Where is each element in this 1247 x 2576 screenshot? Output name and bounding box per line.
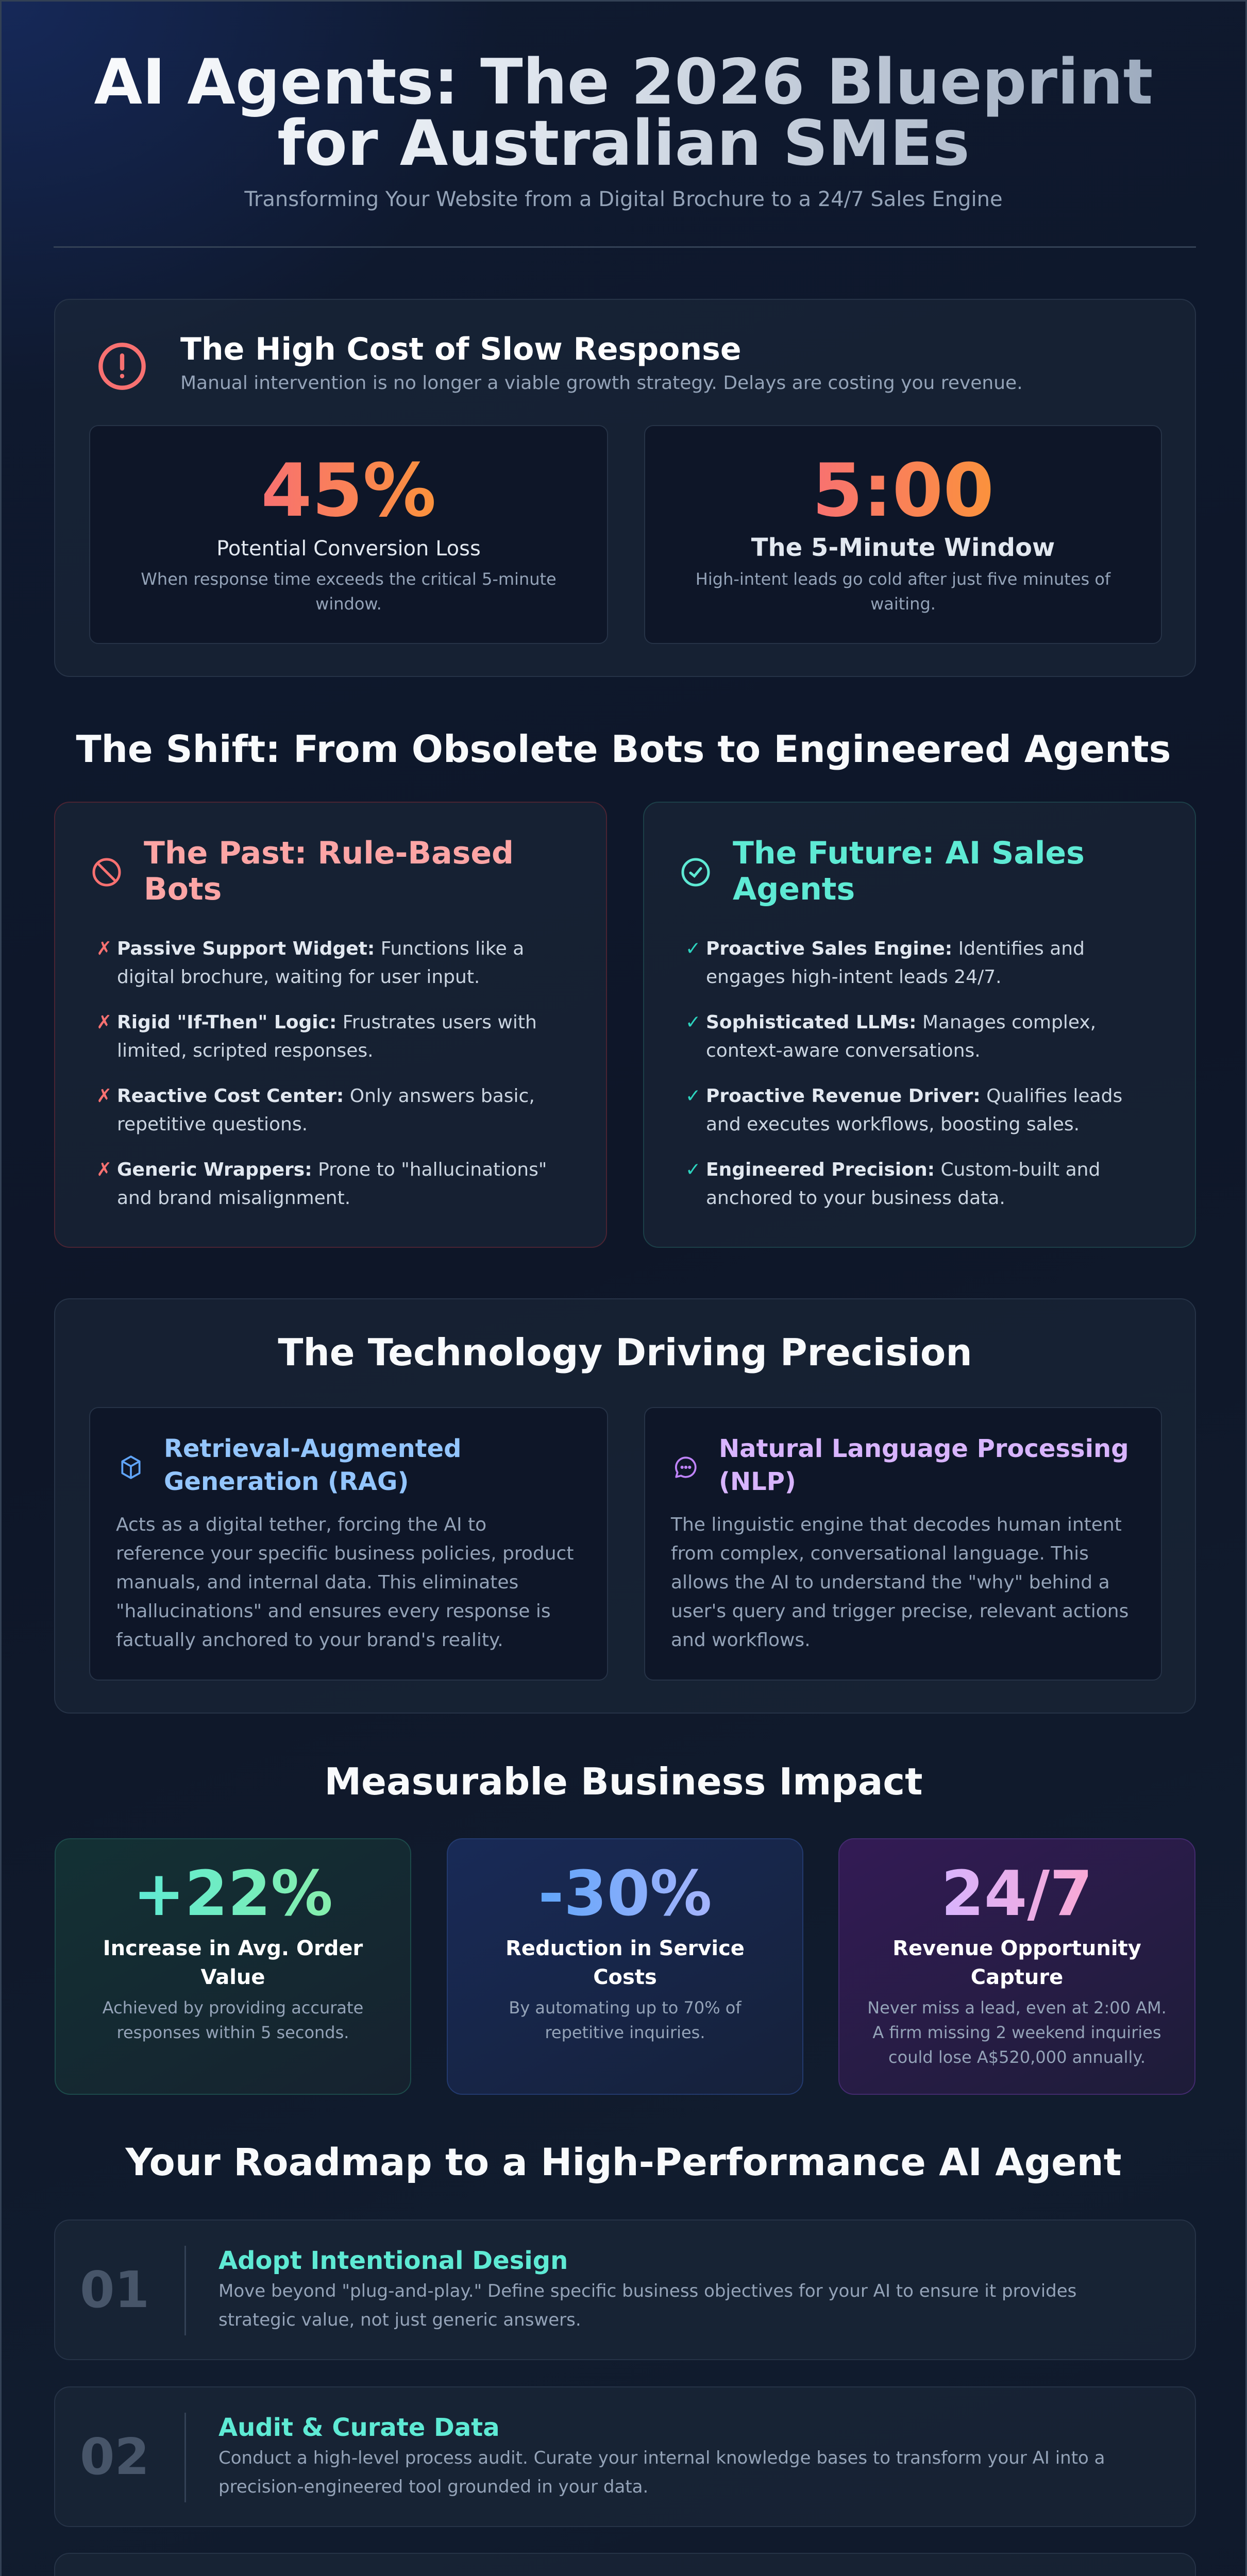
- list: future items: Engineered Precision: Custom-built and: [706, 1159, 1100, 1180]
- list: past items: Generic Wrappers: Prone to "hallucinations": [117, 1159, 547, 1180]
- list: past items: Passive Support Widget: Functions like a: [117, 938, 524, 959]
- stat card: 24/7: 24/7: [941, 1858, 1093, 1930]
- step 02: 02: [80, 2428, 149, 2486]
- stat: 45%: [89, 425, 608, 644]
- title: for Australian SMEs: [277, 107, 970, 180]
- box: NLP: (NLP): [719, 1467, 796, 1496]
- heading: The Technology Driving Precision: [278, 1331, 972, 1374]
- stat card: -30%: [447, 1838, 803, 2095]
- heading: The Past: Rule-Based: [144, 835, 514, 871]
- panel: the future: [643, 802, 1196, 1248]
- list: future items: [685, 938, 1122, 1209]
- stat: 45%: When response time exceeds the critical 5-minute: [141, 569, 557, 589]
- stat card: 24/7: could lose A$520,000 annually.: [888, 2047, 1145, 2067]
- subtitle: Transforming Your Website from a Digital Brochure to a 24/7 Sales Engine: [244, 188, 1003, 211]
- step 02: precision-engineered tool grounded in your data.: [218, 2477, 648, 2497]
- stat card: -30%: repetitive inquiries.: [545, 2023, 705, 2042]
- stat card: 24/7: [838, 1838, 1195, 2095]
- box: RAG: Retrieval-Augmented: [164, 1434, 461, 1463]
- stat card: -30%: Reduction in Service: [505, 1937, 745, 1960]
- box: RAG: "hallucinations" and ensures every response is: [116, 1601, 551, 1622]
- box: RAG: reference your specific business policies, product: [116, 1543, 574, 1564]
- stat card: -30%: -30%: [538, 1858, 712, 1930]
- icon: alert: [98, 343, 146, 390]
- stat: 45%: 45%: [261, 448, 436, 533]
- list: past items: ✗: [96, 1159, 112, 1180]
- list: future items: and executes workflows, boosting sales.: [706, 1114, 1080, 1135]
- list: past items: and brand misalignment.: [117, 1188, 350, 1209]
- stat card: -30%: Costs: [593, 1965, 657, 1989]
- box: RAG: factually anchored to your brand's reality.: [116, 1630, 503, 1651]
- stat: 5:00: High-intent leads go cold after just five minutes of: [696, 569, 1110, 589]
- step 02: Conduct a high-level process audit. Curate your internal knowledge bases to transform your AI into a: [218, 2448, 1105, 2468]
- step 01: Move beyond "plug-and-play." Define specific business objectives for your AI to ensure it provides: [218, 2281, 1076, 2301]
- heading: measurable impact: Measurable Business Impact: [325, 1760, 922, 1803]
- stat card: 24/7: Never miss a lead, even at 2:00 AM.: [867, 1998, 1167, 2018]
- box: NLP: Natural Language Processing: [719, 1434, 1129, 1463]
- icon: cube: [121, 1455, 141, 1479]
- stat: 45%: Potential Conversion Loss: [216, 537, 481, 561]
- list: future items: ✓: [685, 1159, 701, 1180]
- list: future items: anchored to your business data.: [706, 1188, 1005, 1209]
- box: NLP: and workflows.: [671, 1630, 811, 1651]
- step 01: [54, 2219, 1196, 2360]
- icon: check circle: [681, 858, 710, 886]
- box: RAG: Acts as a digital tether, forcing the AI to: [116, 1514, 486, 1535]
- step 02: Audit & Curate Data: [218, 2413, 500, 2442]
- list: past items: ✗: [96, 938, 112, 959]
- list: future items: Proactive Sales Engine: Identifies and: [706, 938, 1085, 959]
- heading: Bots: [144, 871, 222, 907]
- list: future items: ✓: [685, 1012, 701, 1033]
- step 01: Adopt Intentional Design: [218, 2246, 568, 2275]
- stat card: -30%: By automating up to 70% of: [509, 1998, 742, 2018]
- box: NLP: allows the AI to understand the "why" behind a: [671, 1572, 1110, 1593]
- heading: the shift: The Shift: From Obsolete Bots to Engineered Agents: [76, 727, 1171, 771]
- list: past items: Rigid "If-Then" Logic: Frustrates users with: [117, 1012, 537, 1033]
- stat card: +22%: [55, 1838, 411, 2095]
- stat: 5:00: waiting.: [870, 594, 936, 614]
- list: past items: ✗: [96, 1086, 112, 1107]
- stat card: +22%: Value: [200, 1965, 265, 1989]
- heading: [144, 835, 514, 907]
- box: NLP: The linguistic engine that decodes human intent: [671, 1514, 1122, 1535]
- subheading: Manual intervention is no longer a viable growth strategy. Delays are costing you revenue.: [180, 372, 1023, 394]
- box: RAG: Generation (RAG): [164, 1467, 409, 1496]
- list: past items: [96, 938, 547, 1209]
- panel: technology: [54, 1298, 1196, 1714]
- panel: the past: [54, 802, 607, 1248]
- stat card: +22%: responses within 5 seconds.: [117, 2023, 349, 2042]
- step 03: [54, 2553, 1196, 2576]
- list: past items: repetitive questions.: [117, 1114, 308, 1135]
- stat card: +22%: Increase in Avg. Order: [103, 1937, 363, 1960]
- box: RAG: manuals, and internal data. This eliminates: [116, 1572, 518, 1593]
- step 01: strategic value, not just generic answers.: [218, 2310, 581, 2330]
- step 01: 01: [80, 2261, 149, 2319]
- box: NLP: user's query and trigger precise, relevant actions: [671, 1601, 1128, 1622]
- title: AI Agents: The 2026 Blueprint: [94, 46, 1153, 118]
- box: NLP: [644, 1407, 1162, 1681]
- heading: Agents: [733, 871, 855, 907]
- icon: ban: [93, 858, 121, 886]
- list: past items: Reactive Cost Center: Only answers basic,: [117, 1086, 535, 1107]
- list: future items: engages high-intent leads 24/7.: [706, 967, 1002, 988]
- list: future items: ✓: [685, 1086, 701, 1107]
- title: [2, 52, 1245, 174]
- stat: 5:00: [644, 425, 1162, 644]
- box: RAG: [89, 1407, 608, 1681]
- panel: high cost of slow response: [54, 299, 1196, 677]
- step 02: [54, 2386, 1196, 2527]
- stat: 45%: window.: [315, 594, 382, 614]
- list: future items: Proactive Revenue Driver: Qualifies leads: [706, 1086, 1122, 1107]
- stat: 5:00: 5:00: [812, 448, 994, 533]
- heading: The Future: AI Sales: [733, 835, 1085, 871]
- box: NLP: from complex, conversational language. This: [671, 1543, 1089, 1564]
- heading: roadmap: Your Roadmap to a High-Performance AI Agent: [126, 2141, 1121, 2184]
- heading: The High Cost of Slow Response: [180, 331, 742, 367]
- stat card: 24/7: A firm missing 2 weekend inquiries: [872, 2023, 1161, 2042]
- list: future items: Sophisticated LLMs: Manages complex,: [706, 1012, 1096, 1033]
- stat card: 24/7: Capture: [971, 1965, 1063, 1989]
- stat card: 24/7: Revenue Opportunity: [892, 1937, 1141, 1960]
- stat card: +22%: Achieved by providing accurate: [103, 1998, 363, 2018]
- list: future items: ✓: [685, 938, 701, 959]
- list: past items: ✗: [96, 1012, 112, 1033]
- stat: 5:00: The 5-Minute Window: [751, 533, 1055, 562]
- list: past items: digital brochure, waiting for user input.: [117, 967, 480, 988]
- heading: [733, 835, 1085, 907]
- stat card: +22%: +22%: [133, 1858, 333, 1930]
- list: past items: limited, scripted responses.: [117, 1040, 374, 1061]
- icon: chat: [675, 1456, 697, 1478]
- list: future items: context-aware conversations.: [706, 1040, 981, 1061]
